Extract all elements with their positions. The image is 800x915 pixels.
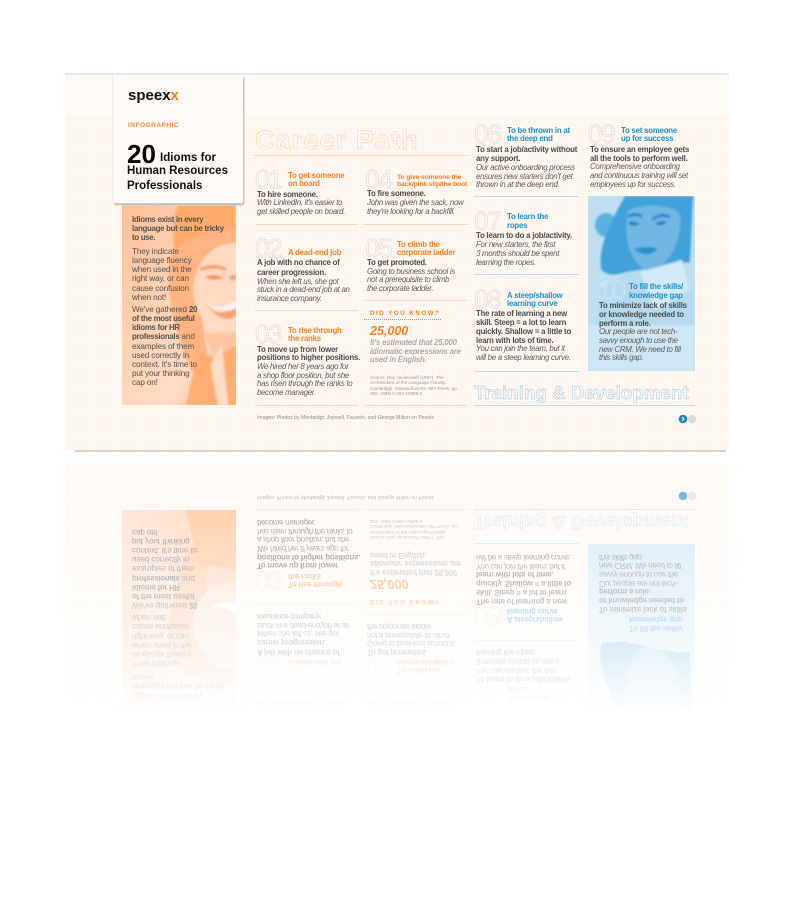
reflection of the sheet: skill. Steep = a lot to learn	[476, 588, 566, 597]
reflection of the sheet: For new starters, the first	[476, 666, 555, 675]
reflection of the sheet: quickly. Shallow = a little to	[476, 579, 571, 588]
reflection of the sheet: language fluency	[132, 650, 192, 659]
reflection of the sheet: They indicate	[132, 659, 179, 668]
intro text block: to use.	[132, 233, 155, 242]
sheet top shadow	[65, 73, 729, 75]
intro text block	[132, 215, 224, 387]
idiom 05: corporate ladder	[397, 248, 455, 257]
idiom 06: ensures new starters don't get	[476, 172, 572, 181]
idiom 04: To fire someone.	[367, 189, 426, 198]
intro text block: language fluency	[132, 256, 192, 265]
reflection of the sheet: idioms for HR	[132, 583, 180, 592]
reflection of the sheet: Images: Photos by Mentatdgt, Jopwell, Fauxels, and George Milton on Pexels	[257, 494, 434, 500]
idiom 08: A steep/shallow	[507, 291, 563, 300]
dotted texture	[65, 115, 729, 450]
idiom 08: quickly. Shallow = a little to	[476, 327, 571, 336]
intro text block: language but can be tricky	[132, 224, 224, 233]
callout: did you know: Architecture of the Language Faculty.	[370, 380, 446, 385]
idiom 10: or knowledge needed to	[599, 310, 684, 319]
reflection of the sheet: You can join the team, but it	[476, 562, 565, 571]
idiom 10: To minimize lack of skills	[599, 301, 687, 310]
reflection of the sheet: When she left us, she got	[257, 629, 339, 638]
idiom 03: positions to higher positions.	[257, 353, 360, 362]
reflection of the sheet: Going to business school is	[367, 639, 455, 648]
pagination buttons	[678, 414, 696, 424]
intro text block: context. It's time to	[132, 360, 197, 369]
idiom 02: insurance company.	[257, 294, 322, 303]
reflection of the sheet: when not!	[132, 613, 166, 622]
callout: did you know: Cambridge, Massachusetts: MIT Press. pp.	[370, 386, 458, 391]
idiom 04: they're looking for a backfill.	[367, 207, 455, 216]
idiom 07	[474, 212, 572, 267]
idiom 06: the deep end	[507, 134, 553, 143]
idiom 05: To climb the	[397, 240, 440, 249]
idiom 07: To learn the	[507, 212, 548, 221]
idiom 02: When she left us, she got	[257, 277, 339, 286]
reflection of the sheet: or knowledge needed to	[599, 596, 684, 605]
idiom 02: career progression.	[257, 268, 326, 277]
reflection of the sheet: the corporate ladder.	[367, 622, 433, 631]
reflection of the sheet: Cambridge, Massachusetts: MIT Press. pp.	[370, 524, 458, 529]
reflection of the sheet: become manager.	[257, 518, 316, 527]
callout: did you know: DID YOU KNOW?	[370, 310, 440, 317]
idiom 01: With LinkedIn, it's easier to	[257, 198, 342, 207]
reflection of the sheet: To rise through	[288, 580, 342, 589]
idiom 08	[474, 290, 571, 362]
idiom 03: has risen through the ranks to	[257, 379, 352, 388]
intro text block: when used in the	[132, 265, 192, 274]
reflection of the sheet: cause confusion	[132, 622, 189, 631]
idiom 08: learn with lots of time.	[476, 336, 554, 345]
idiom 03: become manager.	[257, 388, 316, 397]
idiom 04: To give someone the	[397, 174, 461, 181]
idiom 01: To get someone	[288, 171, 344, 180]
photo: woman with curly hair, blue duotone	[588, 196, 695, 371]
idiom 03: We hired her 8 years ago for	[257, 362, 348, 371]
idiom 05	[366, 238, 456, 293]
idiom 09: all the tools to perform well.	[590, 154, 688, 163]
reflection of the sheet: DID YOU KNOW?	[370, 598, 440, 605]
idiom 05: To get promoted.	[367, 258, 427, 267]
idiom 04	[366, 170, 468, 216]
idiom 01: To hire someone.	[257, 190, 318, 199]
reflection of the sheet: 262. ISBN 0-262-10059-2	[370, 519, 422, 524]
title: Professionals	[127, 180, 202, 192]
idiom 02	[256, 238, 350, 303]
idiom 09	[588, 124, 689, 189]
idiom 07: 3 months should be spent	[476, 249, 559, 258]
idiom 10: knowledge gap	[629, 291, 683, 300]
reflection of the sheet: career progression.	[257, 638, 326, 647]
reflection of the sheet: knowledge gap	[629, 615, 683, 624]
reflection of the sheet: learning curve	[507, 607, 558, 616]
idiom 04: John was given the sack, now	[367, 198, 463, 207]
reflection of the sheet: Source: Ray Jackendoff (1997). The	[370, 535, 444, 540]
reflection of the sheet: new CRM. We need to fill	[599, 561, 681, 570]
intro text block: cap on!	[132, 378, 158, 387]
reflection of the sheet: To learn to do a job/activity.	[476, 675, 572, 684]
reflection of the sheet	[65, 465, 728, 702]
idiom 03: To move up from lower	[257, 345, 338, 354]
idiom 06: To start a job/activity without	[476, 145, 577, 154]
reflection of the sheet: savvy enough to use the	[599, 570, 678, 579]
reflection of the sheet: language but can be tricky	[132, 682, 224, 691]
intro text block: when not!	[132, 293, 166, 302]
callout: did you know: 262. ISBN 0-262-10059-2	[370, 391, 422, 396]
reflection of the sheet: will be a steep learning curve.	[476, 553, 571, 562]
reflection of the sheet: idiomatic expressions are	[370, 559, 461, 568]
reflection of the sheet: corporate ladder	[397, 658, 455, 667]
idiom 06: any support.	[476, 154, 520, 163]
idiom 02: stuck in a dead-end job at an	[257, 285, 350, 294]
idiom 10: To fill the skills/	[629, 282, 683, 291]
idiom 10: Our people are not tech-	[599, 327, 677, 336]
reflection of the sheet: has risen through the ranks to	[257, 527, 352, 536]
callout: did you know: idiomatic expressions are	[370, 347, 461, 356]
intro text block: idioms for HR	[132, 323, 180, 332]
title: Idioms for	[160, 151, 216, 164]
intro text block: We've gathered 20	[132, 305, 197, 314]
photo: smiling woman, orange duotone	[122, 206, 236, 405]
idiom 01: get skilled people on board.	[257, 207, 345, 216]
title: 20	[127, 139, 156, 169]
idiom 06: Our active onboarding process	[476, 163, 575, 172]
image credits: Images: Photos by Mentatdgt, Jopwell, Fauxels, and George Milton on Pexels	[257, 415, 434, 421]
sheet bottom shadow	[75, 449, 726, 452]
idiom 07: To learn to do a job/activity.	[476, 231, 572, 240]
idiom 09: Comprehensive onboarding	[590, 162, 680, 171]
idiom 06: To be thrown in at	[507, 126, 570, 135]
reflection of the sheet: Idioms exist in every	[132, 691, 203, 700]
title	[127, 139, 228, 192]
idiom 09: To set someone	[621, 126, 677, 135]
reflection of the sheet: It's estimated that 25,000	[370, 568, 457, 577]
callout: did you know: 25,000	[370, 324, 408, 338]
reflection of the sheet: positions to higher positions.	[257, 553, 360, 562]
reflection of the sheet: used in English.	[370, 551, 427, 560]
idiom 05: the corporate ladder.	[367, 284, 433, 293]
reflection of the sheet: not a prerequisite to climb	[367, 631, 449, 640]
reflection of the sheet: To move up from lower	[257, 561, 338, 570]
idiom 04: back/pink slip/the boot	[397, 181, 467, 188]
idiom 02: A dead-end job	[288, 248, 341, 257]
callout: did you know: Source: Ray Jackendoff (1997). The	[370, 375, 444, 380]
idiom 10: new CRM. We need to fill	[599, 345, 681, 354]
idiom 08: skill. Steep = a lot to learn	[476, 318, 566, 327]
reflection of the sheet: used correctly in	[132, 555, 189, 564]
reflection of the sheet: put your thinking	[132, 537, 190, 546]
idiom 10: savvy enough to use the	[599, 336, 678, 345]
idiom 08: will be a steep learning curve.	[476, 353, 571, 362]
reflection of the sheet: To climb the	[397, 666, 440, 675]
reflection of the sheet: they're looking for a backfill.	[367, 699, 455, 708]
idiom 08: You can join the team, but it	[476, 344, 565, 353]
label: infographic: INFOGRAPHIC	[128, 122, 179, 129]
callout: did you know: It's estimated that 25,000	[370, 338, 457, 347]
idiom 10: this skills gap.	[599, 353, 643, 362]
idiom 03: To rise through	[288, 326, 342, 335]
reflection of the sheet: A dead-end job	[288, 658, 341, 667]
reflection of the sheet: To minimize lack of skills	[599, 605, 687, 614]
idiom 09: and continuous training will set	[590, 171, 688, 180]
idiom 01	[256, 170, 345, 216]
idiom 05: Going to business school is	[367, 267, 455, 276]
intro text block: professionals and	[132, 332, 195, 341]
idiom 07: For new starters, the first	[476, 240, 555, 249]
idiom 09: employees up for success.	[590, 180, 676, 189]
reflection of the sheet: right way, or can	[132, 632, 189, 641]
intro text block: cause confusion	[132, 284, 189, 293]
reflection of the sheet: To fill the skills/	[629, 624, 683, 633]
reflection of the sheet: To learn the	[507, 694, 548, 703]
reflection of the sheet: this skills gap.	[599, 553, 643, 562]
logo: speexx: speexx	[128, 87, 179, 104]
intro text block: examples of them	[132, 342, 194, 351]
idiom 03	[256, 324, 360, 397]
idiom 08: learning curve	[507, 299, 558, 308]
reflection of the sheet: get skilled people on board.	[257, 699, 345, 708]
reflection of the sheet: context. It's time to	[132, 546, 197, 555]
intro text block: used correctly in	[132, 351, 189, 360]
intro text block: of the most useful	[132, 314, 195, 323]
reflection of the sheet: of the most useful	[132, 592, 195, 601]
idiom 02: A job with no chance of	[257, 258, 340, 267]
reflection of the sheet: To get promoted.	[367, 648, 427, 657]
idiom 05: not a prerequisite to climb	[367, 275, 449, 284]
reflection of the sheet: learning the ropes.	[476, 648, 536, 657]
idiom 03: a shop floor position, but she	[257, 371, 349, 380]
reflection of the sheet: learn with lots of time.	[476, 570, 554, 579]
reflection of the sheet: Our people are not tech-	[599, 579, 677, 588]
reflection of the sheet: The rate of learning a new	[476, 597, 567, 606]
reflection of the sheet: 3 months should be spent	[476, 657, 559, 666]
intro text block: put your thinking	[132, 369, 190, 378]
callout: did you know	[364, 310, 461, 396]
reflection of the sheet: A steep/shallow	[507, 615, 563, 624]
reflection of the sheet: Architecture of the Language Faculty.	[370, 530, 446, 535]
idiom 01: on board	[288, 179, 320, 188]
reflection of the sheet: the ranks	[288, 572, 321, 581]
reflection of the sheet: insurance company.	[257, 612, 322, 621]
idiom 07: learning the ropes.	[476, 258, 536, 267]
reflection of the sheet: ropes	[507, 685, 527, 694]
sheet background panel	[65, 75, 729, 450]
idiom 03: the ranks	[288, 334, 321, 343]
intro text block: right way, or can	[132, 274, 189, 283]
reflection of the sheet: perform a role.	[599, 587, 651, 596]
idiom 07: ropes	[507, 221, 527, 230]
idiom 09: To ensure an employee gets	[590, 145, 689, 154]
title card	[113, 75, 243, 203]
reflection of the sheet: stuck in a dead-end job at an	[257, 621, 350, 630]
title: Human Resources	[127, 165, 228, 177]
idiom 10	[599, 280, 687, 362]
idiom 10: perform a role.	[599, 319, 651, 328]
idiom 08: The rate of learning a new	[476, 309, 567, 318]
reflection of the sheet: examples of them	[132, 564, 194, 573]
reflection of the sheet: professionals and	[132, 574, 195, 583]
reflection of the sheet: We hired her 8 years ago for	[257, 544, 348, 553]
reflection of the sheet: A job with no chance of	[257, 648, 340, 657]
reflection of the sheet: cap on!	[132, 528, 158, 537]
intro text block: They indicate	[132, 247, 179, 256]
reflection of the sheet: We've gathered 20	[132, 601, 197, 610]
intro text block: Idioms exist in every	[132, 215, 203, 224]
reflection of the sheet: to use.	[132, 673, 155, 682]
idiom 06	[474, 124, 578, 189]
reflection of the sheet: a shop floor position, but she	[257, 535, 349, 544]
callout: did you know: used in English.	[370, 355, 427, 364]
idiom 06: thrown in at the deep end.	[476, 180, 559, 189]
reflection of the sheet: 25,000	[370, 577, 408, 591]
idiom 09: up for success	[621, 134, 673, 143]
reflection of the sheet: when used in the	[132, 641, 192, 650]
